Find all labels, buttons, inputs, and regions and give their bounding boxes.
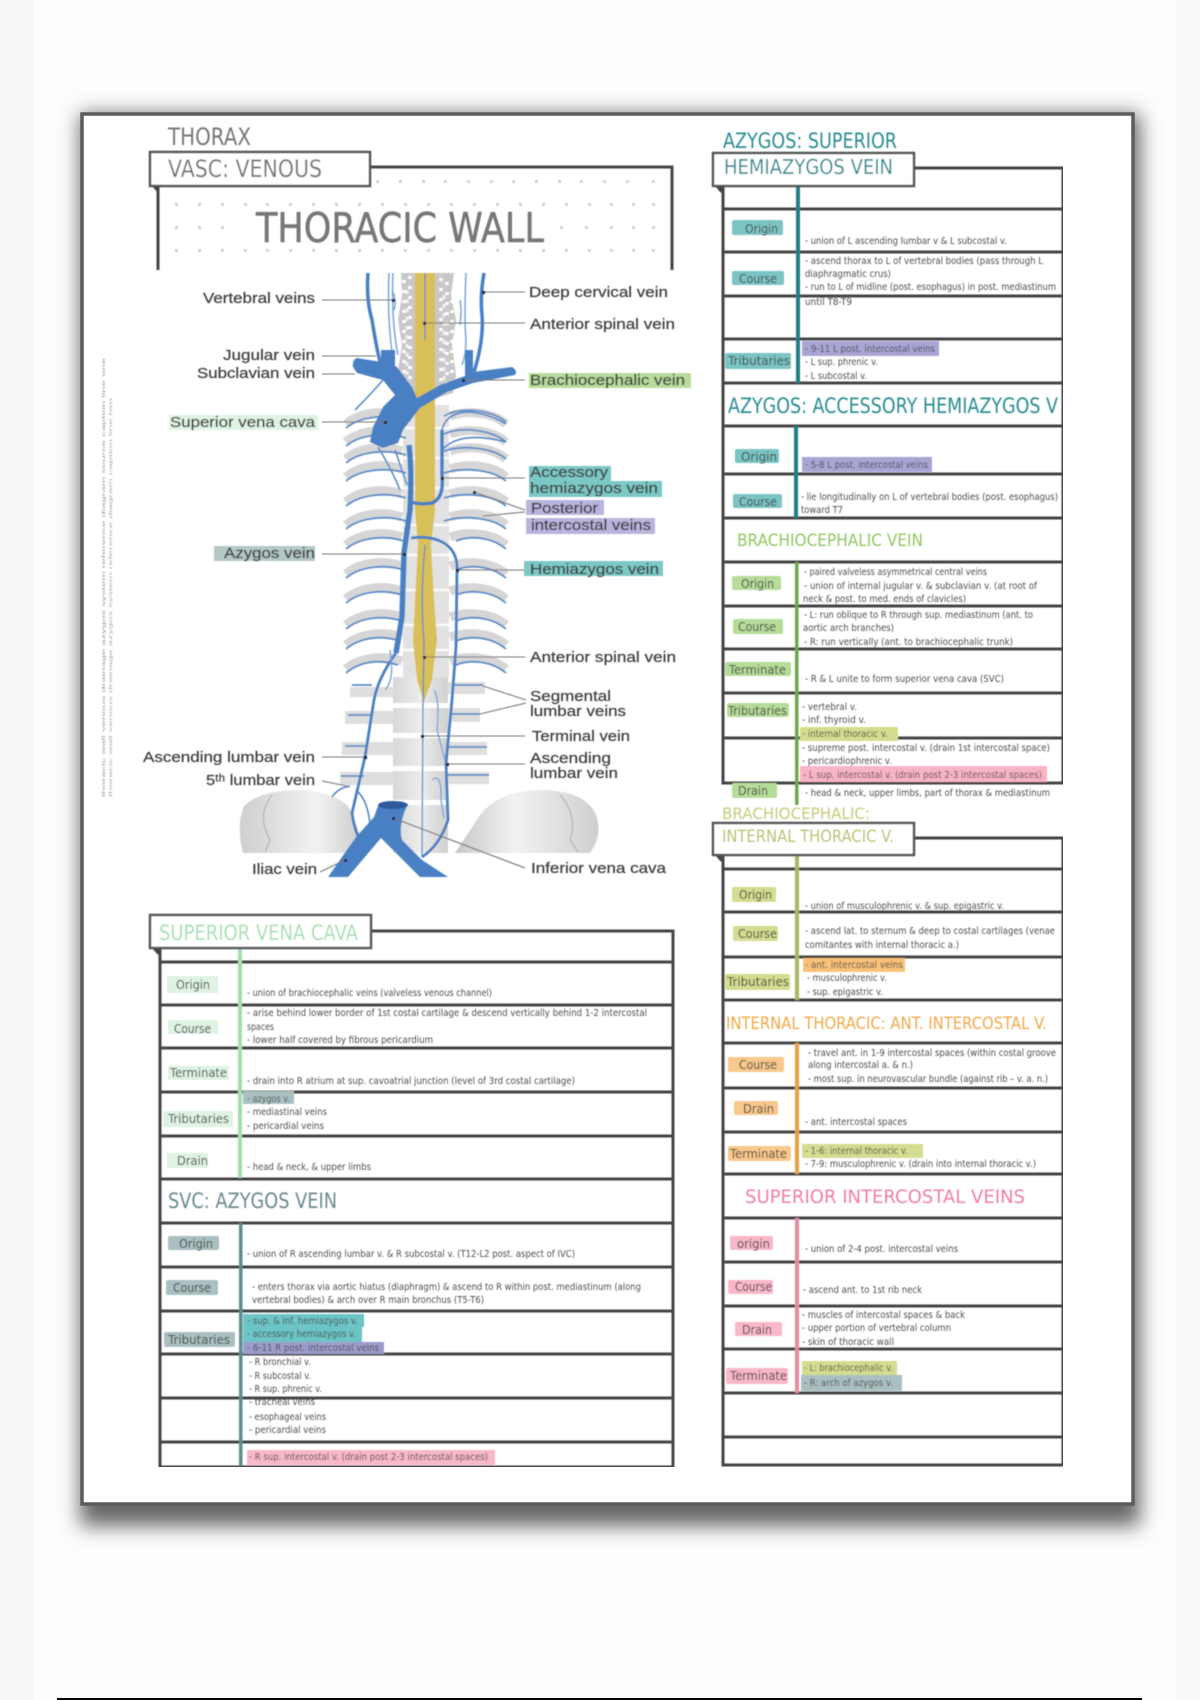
label: segmental lumbar veins (530, 688, 626, 720)
row: internal thoracic tributaries: - ant. intercostal veins (805, 960, 903, 971)
row: brachiocephalic tributaries (727, 702, 1050, 782)
label: anterior spinal vein upper: Anterior spinal vein (530, 316, 675, 333)
ribs (341, 410, 506, 776)
row: brachiocephalic tributaries: - vertebral v. (802, 702, 857, 713)
row: hemiazygos tributaries (725, 341, 939, 382)
row: anterior intercostal drain: Drain (743, 1102, 774, 1116)
row: hemiazygos tributaries: Tributaries (727, 354, 790, 368)
row: internal thoracic origin: - union of musculophrenic v. & sup. epigastric v. (805, 901, 1004, 912)
row: brachiocephalic course: - R: run vertically (ant. to brachiocephalic trunk) (804, 637, 1013, 648)
section label: thorax: THORAX (167, 123, 251, 151)
row: internal thoracic tributaries: Tributaries (726, 975, 789, 989)
heading: svc azygos vein: SVC: AZYGOS VEIN (168, 1189, 337, 1213)
row: brachiocephalic terminate: Terminate (728, 663, 786, 677)
vertical source caption (101, 357, 113, 797)
label: jugular vein: Jugular vein (223, 347, 315, 364)
row: brachiocephalic tributaries: - inf. thyroid v. (802, 715, 866, 726)
row: origin (167, 976, 492, 999)
row: brachiocephalic origin: - paired valveless asymmetrical central veins (804, 567, 987, 578)
row: terminate (168, 1066, 575, 1087)
row: internal thoracic origin: Origin (739, 888, 772, 902)
row: anterior intercostal course: Course (739, 1058, 777, 1072)
label: segmental lumbar veins: lumbar veins (530, 703, 626, 720)
heading: brachiocephalic vein: BRACHIOCEPHALIC VEIN (737, 531, 923, 551)
row: terminate: Terminate (169, 1066, 227, 1080)
label: inferior vena cava: Inferior vena cava (531, 860, 667, 877)
row: internal thoracic tributaries (725, 958, 905, 998)
row: superior intercostal course: - ascend ant. to 1st rib neck (803, 1285, 922, 1296)
row: terminate: - drain into R atrium at sup. cavoatrial junction (level of 3rd costal cartilage) (247, 1076, 575, 1087)
row: tributaries: - azygos v. (247, 1094, 290, 1105)
row: brachiocephalic terminate: - R & L unite to form superior vena cava (SVC) (805, 674, 1004, 685)
label: ascending lumbar vein left: Ascending lumbar vein (143, 749, 315, 766)
row: brachiocephalic tributaries: Tributaries (727, 704, 787, 718)
row: hemiazygos course: diaphragmatic crus) (805, 269, 891, 280)
row: hemiazygos origin: - union of L ascending lumbar v & L subcostal v. (805, 236, 1007, 247)
row: azygos origin (168, 1236, 575, 1260)
page frame (82, 114, 1133, 1504)
row: brachiocephalic course: - L: run oblique to R through sup. mediastinum (ant. to (804, 610, 1033, 621)
anterior intercostal divider (795, 1043, 799, 1174)
row: hemiazygos origin (732, 220, 1007, 247)
veins (332, 273, 506, 857)
anatomy diagram (143, 273, 691, 878)
row: azygos tributaries: - R subcostal v. (249, 1371, 311, 1382)
hemiazygos vein (411, 537, 457, 857)
label: segmental lumbar veins: Segmental (530, 688, 611, 705)
row: anterior intercostal terminate (728, 1144, 1036, 1170)
row: accessory origin (735, 449, 932, 472)
row: brachiocephalic tributaries: - pericardiophrenic v. (802, 756, 892, 767)
row: tributaries: - pericardial veins (247, 1121, 324, 1132)
row: tributaries: - mediastinal veins (247, 1107, 327, 1118)
skeleton (240, 273, 598, 853)
row: anterior intercostal course: - most sup. in neurovascular bundle (against rib – v. a. n.) (808, 1074, 1048, 1085)
row: superior intercostal drain: - muscles of intercostal spaces & back (802, 1310, 965, 1321)
heading: anterior intercostal: INTERNAL THORACIC: ANT. INTERCOSTAL V. (726, 1014, 1047, 1034)
row: brachiocephalic origin (732, 567, 1038, 605)
row: azygos tributaries (164, 1314, 495, 1465)
label: posterior intercostal veins: Posterior (531, 500, 598, 517)
row: accessory course: - lie longitudinally on L of vertebral bodies (post. esophagus) (801, 492, 1058, 503)
jugular and vertebral veins (368, 273, 484, 372)
superior intercostal divider (795, 1218, 799, 1393)
row: accessory course: Course (739, 495, 777, 509)
spinal cord (413, 273, 437, 702)
row: superior intercostal drain: - upper portion of vertebral column (802, 1323, 951, 1334)
label: vertebral veins: Vertebral veins (203, 290, 315, 307)
row: hemiazygos course: - ascend thorax to L of vertebral bodies (pass through L (805, 256, 1044, 267)
tab: hemiazygos vein (713, 153, 914, 193)
title panel (150, 152, 672, 270)
main title: THORACIC WALL (255, 204, 544, 252)
internal thoracic divider (795, 855, 799, 1000)
row: drain (167, 1153, 371, 1173)
label: ascending lumbar vein right: Ascending (530, 750, 611, 767)
azygos vein (396, 445, 411, 653)
row: anterior intercostal drain: - ant. intercostal spaces (805, 1117, 907, 1128)
row: superior intercostal drain (735, 1310, 965, 1348)
label: posterior intercostal veins: intercostal veins (531, 517, 651, 534)
label: accessory hemiazygos vein: hemiazygos vein (530, 480, 658, 497)
heading: superior intercostal veins: SUPERIOR INTERCOSTAL VEINS (745, 1186, 1025, 1208)
row: azygos course: vertebral bodies) & arch over R main bronchus (T5-T6) (252, 1295, 484, 1306)
row: azygos tributaries: - sup. & inf. hemiazygos v. (247, 1316, 358, 1327)
label: iliac vein: Iliac vein (252, 861, 317, 878)
panel: azygos superior hemiazygos and accessory and brachiocephalic (713, 129, 1063, 805)
row: azygos course: - enters thorax via aortic hiatus (diaphragm) & ascend to R within post. mediastinum (along (252, 1282, 641, 1293)
hemiazygos divider (796, 186, 800, 383)
row: drain: Drain (177, 1154, 208, 1168)
label: ascending lumbar vein right (530, 750, 618, 782)
row: anterior intercostal drain (734, 1101, 907, 1128)
row: internal thoracic course: Course (738, 927, 777, 941)
row: anterior intercostal terminate: - 7-9: musculophrenic v. (drain into internal thoracic v.) (805, 1159, 1036, 1170)
row: azygos tributaries: - accessory hemiazygos v. (247, 1329, 356, 1340)
row: anterior intercostal course (728, 1048, 1056, 1085)
page frame shadow (80, 114, 1140, 1526)
heading: accessory hemiazygos: AZYGOS: ACCESSORY HEMIAZYGOS V (728, 394, 1059, 418)
row: internal thoracic origin (732, 887, 1004, 912)
superior vena cava and brachiocephalic veins (353, 350, 516, 448)
table frame and rows (723, 168, 1063, 783)
row: hemiazygos course (732, 256, 1056, 308)
row: superior intercostal terminate: Terminate (729, 1369, 787, 1383)
row: azygos tributaries: - R sup. intercostal v. (drain post 2-3 intercostal spaces) (249, 1452, 488, 1463)
row: origin: - union of brachiocephalic veins (valveless venous channel) (247, 988, 492, 999)
inferior vena cava and iliac veins (328, 801, 448, 877)
label: anterior spinal vein lower: Anterior spinal vein (530, 649, 676, 666)
row: superior intercostal course (728, 1280, 922, 1296)
bottom rule (57, 1698, 1142, 1700)
row: azygos tributaries: - 6-11 R post. intercostal veins (247, 1343, 379, 1354)
label: superior vena cava: Superior vena cava (170, 414, 316, 431)
row: brachiocephalic course: Course (738, 620, 776, 634)
row: hemiazygos tributaries: - L sup. phrenic v. (805, 357, 878, 368)
label: deep cervical vein: Deep cervical vein (529, 284, 668, 301)
label: hemiazygos vein: Hemiazygos vein (530, 561, 659, 578)
row: internal thoracic course: - ascend lat. to sternum & deep to costal cartilages (venae (805, 926, 1055, 937)
row: superior intercostal drain: Drain (742, 1323, 772, 1337)
row: hemiazygos tributaries: - L subcostal v. (805, 371, 867, 382)
row: internal thoracic course: comitantes with internal thoracic a.) (805, 940, 959, 951)
row: azygos course (166, 1280, 641, 1306)
label: accessory hemiazygos vein (529, 464, 662, 497)
row: accessory course (733, 492, 1058, 516)
row: course: - lower half covered by fibrous pericardium (247, 1035, 433, 1046)
anterior spinal vein (422, 273, 425, 857)
title dot grid (175, 180, 655, 252)
row: brachiocephalic origin: neck & post. to med. ends of clavicles) (803, 594, 966, 605)
row: brachiocephalic origin: - union of internal jugular v. & subclavian v. (at root of (804, 581, 1038, 592)
row: course: spaces (247, 1022, 274, 1033)
row: anterior intercostal course: - travel ant. in 1-9 intercostal spaces (within costal groove (808, 1048, 1056, 1059)
terminal and lumbar loops (385, 650, 445, 818)
label: accessory hemiazygos vein: Accessory (530, 464, 609, 481)
row: superior intercostal origin: - union of 2-4 post. intercostal veins (805, 1244, 958, 1255)
accessory hemiazygos vein (411, 430, 442, 504)
label: subclavian vein: Subclavian vein (197, 365, 315, 382)
row: origin: Origin (176, 978, 210, 992)
row: brachiocephalic course: aortic arch branches) (803, 623, 894, 634)
row: anterior intercostal course: along intercostal a. & n.) (808, 1060, 913, 1071)
row: azygos course: Course (173, 1281, 211, 1295)
row: superior intercostal origin (730, 1236, 958, 1255)
label: terminal vein: Terminal vein (532, 728, 630, 745)
tab: superior vena cava (150, 915, 371, 955)
accessory divider (794, 426, 798, 518)
row: anterior intercostal terminate: Terminate (729, 1147, 787, 1161)
panel: internal thoracic, anterior intercostal, superior intercostal (713, 804, 1063, 1465)
row: internal thoracic tributaries: - sup. epigastric v. (807, 987, 883, 998)
row: brachiocephalic drain (732, 783, 1050, 799)
superior vena cava divider (238, 948, 242, 1178)
row: hemiazygos course: - run to L of midline (post. esophagus) in post. mediastinum (805, 282, 1056, 293)
row: accessory course: toward T7 (801, 505, 843, 516)
title tab (150, 152, 370, 193)
title tab: VASC: VENOUS (168, 155, 322, 183)
tab: internal thoracic vein: INTERNAL THORACIC V. (722, 827, 894, 847)
row: azygos tributaries: - R bronchial v. (249, 1357, 311, 1368)
row: azygos tributaries: - R sup. phrenic v. (249, 1384, 322, 1395)
heading: brachiocephalic: BRACHIOCEPHALIC: (722, 804, 870, 823)
row: accessory origin: - 5-8 L post. intercostal veins (805, 460, 928, 471)
row: hemiazygos course: Course (739, 272, 777, 286)
row: azygos tributaries: - tracheal veins (249, 1397, 315, 1408)
label: fifth lumbar vein: 5ᵗʰ lumbar vein (206, 772, 315, 789)
row: course: - arise behind lower border of 1st costal cartilage & descend vertically behind 1-2 intercostal (247, 1008, 647, 1019)
azygos vein divider (239, 1223, 242, 1466)
row: brachiocephalic course (733, 610, 1033, 648)
heading: azygos superior: AZYGOS: SUPERIOR (723, 129, 897, 153)
row: superior intercostal terminate: - L: brachiocephalic v. (804, 1363, 893, 1374)
row: anterior intercostal terminate: - 1-6: internal thoracic v. (805, 1146, 908, 1157)
row: brachiocephalic tributaries: - internal thoracic v. (802, 729, 888, 740)
tab: hemiazygos vein: HEMIAZYGOS VEIN (724, 155, 893, 179)
row: azygos tributaries: - esophageal veins (249, 1412, 326, 1423)
vertical source caption: thoracic wall venous drainage azygos system reference diagram source caption line one (101, 357, 106, 797)
row: brachiocephalic tributaries: - supreme post. intercostal v. (drain 1st intercostal space) (802, 743, 1050, 754)
row: azygos tributaries: - pericardial veins (249, 1425, 326, 1436)
leader lines (320, 291, 526, 872)
row: hemiazygos tributaries: - 9-11 L post. intercostal veins (805, 344, 935, 355)
row: superior intercostal course: Course (735, 1280, 772, 1294)
row: brachiocephalic origin: Origin (741, 577, 774, 591)
row: course (168, 1008, 647, 1046)
row: tributaries (163, 1091, 327, 1132)
row: azygos origin: Origin (179, 1237, 213, 1251)
vertical source caption: thoracic wall venous drainage azygos system reference diagram caption line two (108, 397, 113, 797)
row: superior intercostal terminate: - R: arch of azygos v. (804, 1378, 893, 1389)
row: internal thoracic course (733, 926, 1055, 951)
azygos arch branches (355, 380, 407, 490)
table frame and rows (160, 931, 673, 1467)
row: tributaries: Tributaries (167, 1112, 229, 1126)
row: azygos origin: - union of R ascending lumbar v. & R subcostal v. (T12-L2 post. aspect of IVC) (247, 1249, 575, 1260)
tab: superior vena cava: SUPERIOR VENA CAVA (159, 921, 359, 945)
row: brachiocephalic terminate (725, 662, 1004, 685)
row: internal thoracic tributaries: - musculophrenic v. (807, 973, 887, 984)
ascending lumbar vein left (352, 653, 396, 845)
row: superior intercostal terminate (726, 1361, 902, 1391)
tab: internal thoracic vein (713, 823, 914, 862)
row: brachiocephalic drain: Drain (738, 784, 768, 798)
panel: superior vena cava and azygos vein (150, 915, 673, 1467)
table frame and rows (723, 838, 1063, 1465)
row: accessory origin: Origin (741, 450, 777, 464)
row: course: Course (174, 1022, 211, 1036)
brachiocephalic divider (795, 562, 798, 805)
row: brachiocephalic drain: - head & neck, upper limbs, part of thorax & mediastinum (805, 788, 1050, 799)
label: brachiocephalic vein: Brachiocephalic vein (530, 372, 685, 389)
row: hemiazygos origin: Origin (745, 222, 778, 236)
label: ascending lumbar vein right: lumbar vein (530, 765, 618, 782)
row: drain: - head & neck, & upper limbs (247, 1162, 371, 1173)
label: posterior intercostal veins (526, 500, 655, 534)
row: superior intercostal drain: - skin of thoracic wall (802, 1337, 894, 1348)
row: brachiocephalic tributaries: - L sup. intercostal v. (drain post 2-3 intercostal spaces) (803, 770, 1042, 781)
row: azygos tributaries: Tributaries (167, 1333, 230, 1347)
row: superior intercostal origin: origin (737, 1237, 770, 1251)
row: hemiazygos course: until T8-T9 (805, 297, 852, 308)
label: azygos vein: Azygos vein (224, 545, 315, 562)
